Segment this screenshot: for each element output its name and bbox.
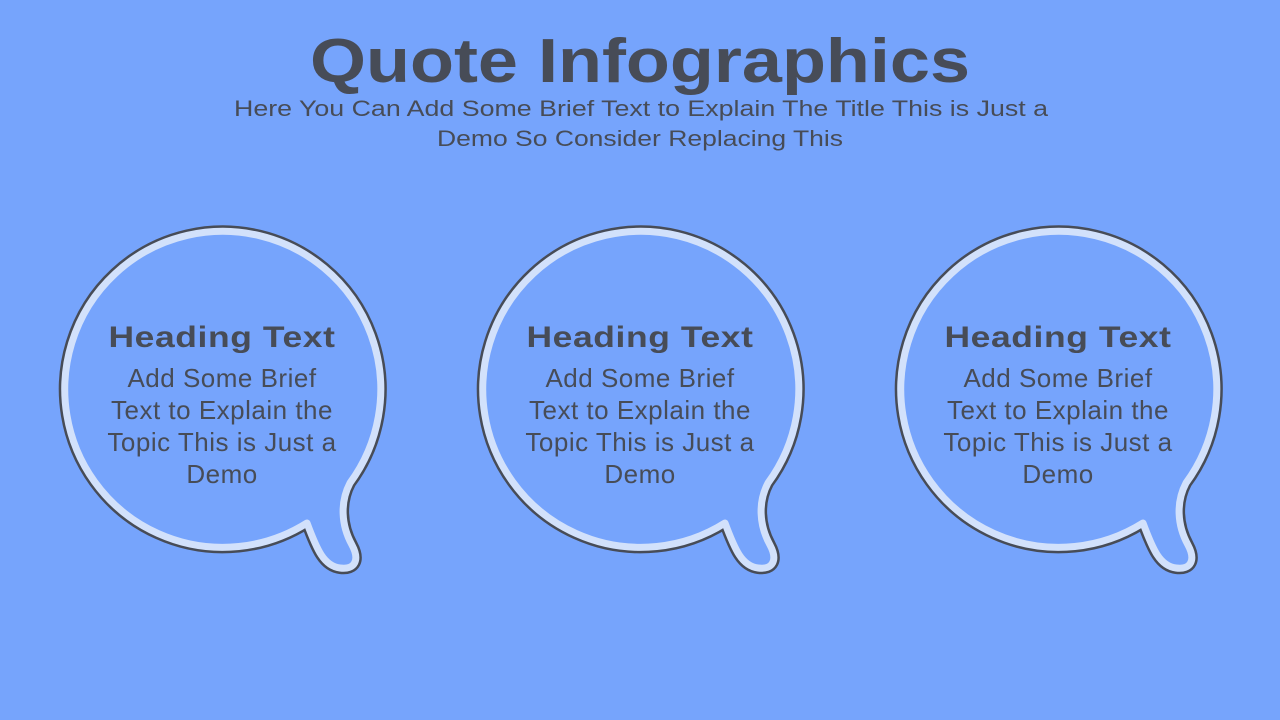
panel: bubble 3: Add Some Brief	[963, 363, 1153, 393]
panel: bubble 3: Topic This is Just a	[943, 427, 1173, 457]
panel: bubble 2: Heading Text	[526, 321, 754, 354]
panel: bubble 1: Demo	[186, 459, 258, 489]
panel: bubble 1: Topic This is Just a	[107, 427, 337, 457]
panel: bubble 3: Text to Explain the	[947, 395, 1169, 425]
panel: bubble 3: Heading Text	[944, 321, 1172, 354]
subtitle: Here You Can Add Some Brief Text to Explain The Title This is Just a	[234, 96, 1049, 121]
subtitle: Demo So Consider Replacing This	[437, 126, 843, 151]
panel: bubble 2	[483, 231, 799, 568]
panel: bubble 2: Topic This is Just a	[525, 427, 755, 457]
panel: bubble 2: Text to Explain the	[529, 395, 751, 425]
panel: bubble 1: Add Some Brief	[127, 363, 317, 393]
panel: bubble 3	[901, 231, 1217, 568]
panel: bubble 1	[65, 231, 381, 568]
title: Quote Infographics	[310, 27, 970, 96]
subtitle	[234, 96, 1049, 151]
panel: bubble 3: Demo	[1022, 459, 1094, 489]
panel: bubble 2: Add Some Brief	[545, 363, 735, 393]
panel: bubble 1: Text to Explain the	[111, 395, 333, 425]
panel: bubble 2: Demo	[604, 459, 676, 489]
panel: bubble 1: Heading Text	[108, 321, 336, 354]
